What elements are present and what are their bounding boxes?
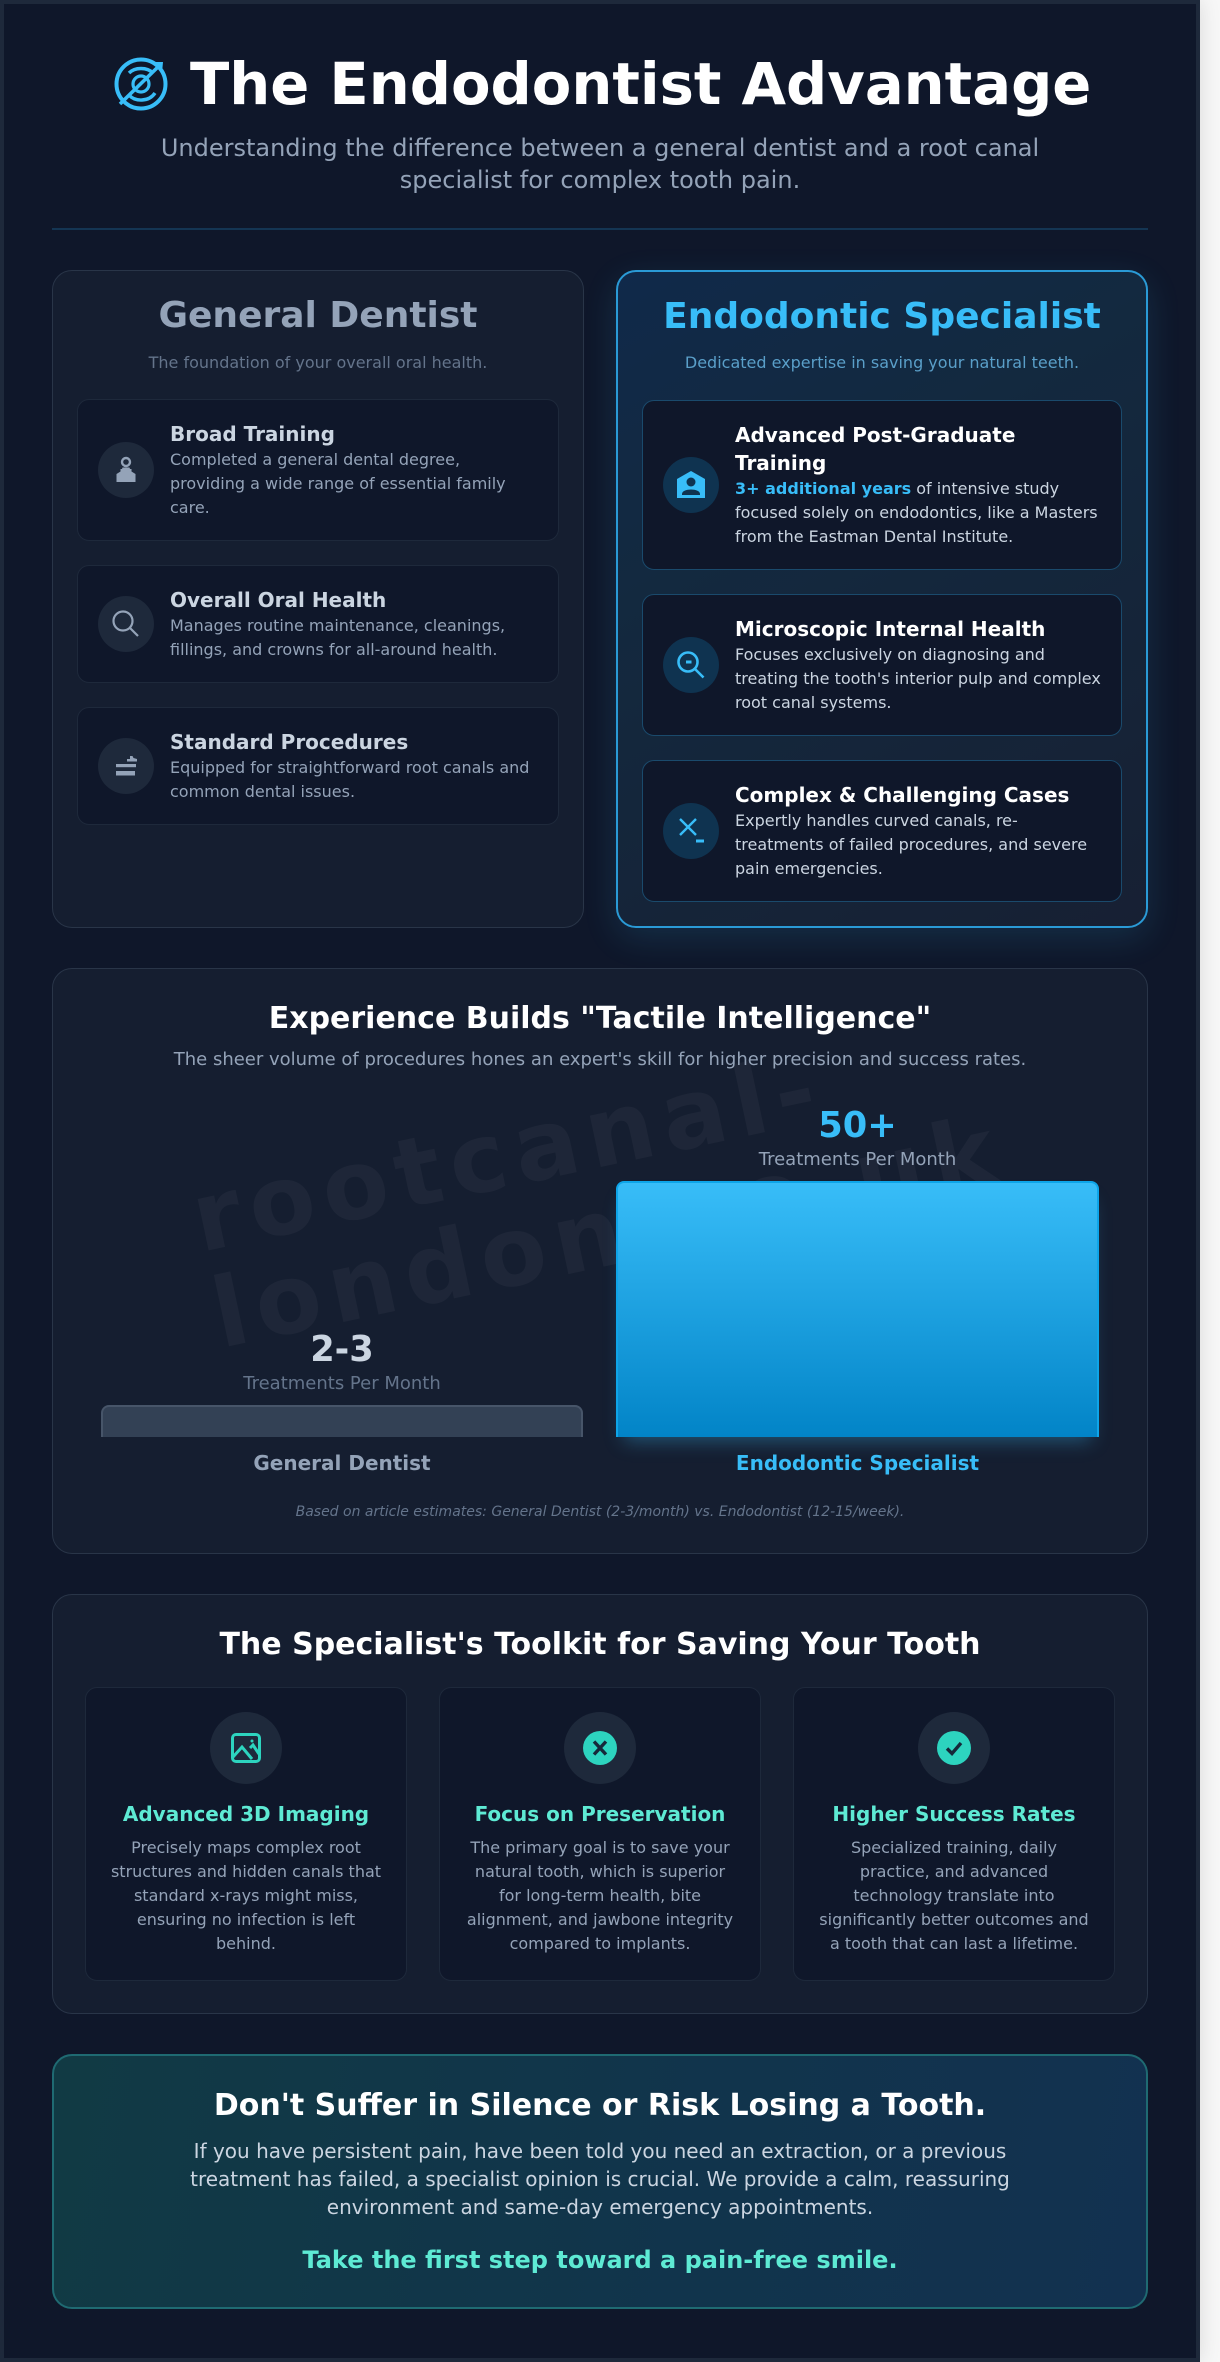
card description: technology translate into xyxy=(853,1886,1055,1905)
item: broad training: Broad Training xyxy=(170,422,335,446)
panel: general dentist xyxy=(52,270,584,928)
icon: check circle xyxy=(918,1712,990,1784)
card description xyxy=(111,1838,381,1953)
card title: Focus on Preservation xyxy=(475,1802,725,1826)
tagline: endodontic specialist: Dedicated expertise in saving your natural teeth. xyxy=(685,353,1079,372)
item: overall oral health: Overall Oral Health xyxy=(170,588,386,612)
callout text: treatment has failed, a specialist opinion is crucial. We provide a calm, reassuring xyxy=(190,2167,1010,2191)
card description: standard x-rays might miss, xyxy=(134,1886,358,1905)
item: standard procedures: common dental issues. xyxy=(170,782,355,801)
category label: Endodontic Specialist xyxy=(736,1451,979,1475)
card description: alignment, and jawbone integrity xyxy=(467,1910,733,1929)
card description: a tooth that can last a lifetime. xyxy=(830,1934,1078,1953)
icon: microscope lens xyxy=(663,637,719,693)
item: microscopic internal health xyxy=(642,594,1122,736)
panel: endodontic specialist xyxy=(616,270,1148,928)
callout text: environment and same-day emergency appointments. xyxy=(327,2195,873,2219)
card: higher success rates xyxy=(793,1687,1115,1981)
icon: graduate in house xyxy=(663,457,719,513)
item: standard procedures xyxy=(77,707,559,825)
card description: compared to implants. xyxy=(510,1934,690,1953)
card description: Specialized training, daily xyxy=(851,1838,1057,1857)
item: microscopic internal health: Microscopic Internal Health xyxy=(735,617,1045,641)
panel: specialist toolkit xyxy=(52,1594,1148,2014)
item: overall oral health xyxy=(77,565,559,683)
item: post-graduate training: from the Eastman Dental Institute. xyxy=(735,527,1013,546)
card title: Advanced 3D Imaging xyxy=(123,1802,369,1826)
card description: ensuring no infection is left xyxy=(137,1910,355,1929)
icon: magnifier xyxy=(98,596,154,652)
card: focus on preservation xyxy=(439,1687,761,1981)
item: overall oral health: fillings, and crowns for all-around health. xyxy=(170,640,498,659)
icon: circled x xyxy=(564,1712,636,1784)
icon: target with arrow xyxy=(114,58,168,110)
subtitle xyxy=(161,134,1039,194)
card description: The primary goal is to save your xyxy=(470,1838,730,1857)
card description xyxy=(467,1838,733,1953)
bar rectangle xyxy=(101,1405,583,1437)
icon: cross and dash xyxy=(663,803,719,859)
watermark: rootcanal- xyxy=(182,1031,834,1275)
item: broad training: Completed a general dental degree, xyxy=(170,450,460,469)
heading: toolkit: The Specialist's Toolkit for Saving Your Tooth xyxy=(219,1627,981,1662)
item: overall oral health: Manages routine maintenance, cleanings, xyxy=(170,616,505,635)
item: post-graduate training: Advanced Post-Graduate xyxy=(735,423,1015,447)
value label: Treatments Per Month xyxy=(759,1149,956,1170)
value label: Treatments Per Month xyxy=(243,1373,441,1394)
value: 50+: 50+ xyxy=(818,1105,897,1146)
card title: Higher Success Rates xyxy=(832,1802,1076,1826)
icon: image frame xyxy=(210,1712,282,1784)
category label: General Dentist xyxy=(253,1451,431,1475)
item: broad training xyxy=(77,399,559,541)
card description xyxy=(819,1838,1089,1953)
heading: tactile intelligence: Experience Builds "Tactile Intelligence" xyxy=(269,1001,931,1036)
card description: for long-term health, bite xyxy=(499,1886,701,1905)
title with icon: The Endodontist Advantage xyxy=(190,51,1091,118)
callout heading: Don't Suffer in Silence or Risk Losing a Tooth. xyxy=(214,2088,986,2123)
callout text: If you have persistent pain, have been told you need an extraction, or a previous xyxy=(194,2139,1006,2163)
item: microscopic internal health: Focuses exclusively on diagnosing and xyxy=(735,645,1045,664)
item: microscopic internal health: treating the tooth's interior pulp and complex xyxy=(735,669,1101,688)
chart footnote: Based on article estimates: General Dentist (2-3/month) vs. Endodontist (12-15/week). xyxy=(296,1504,904,1520)
item: post-graduate training: focused solely on endodontics, like a Masters xyxy=(735,503,1098,522)
callout: call to action xyxy=(52,2054,1148,2309)
item: post-graduate training: Training xyxy=(735,451,826,475)
card description: natural tooth, which is superior xyxy=(475,1862,725,1881)
item: complex cases xyxy=(642,760,1122,902)
bar rectangle xyxy=(616,1181,1099,1437)
bar: endodontic specialist xyxy=(614,1105,1102,1475)
item: microscopic internal health: root canal systems. xyxy=(735,693,892,712)
icon: person xyxy=(98,442,154,498)
heading: endodontic specialist: Endodontic Specialist xyxy=(663,296,1101,337)
item: complex cases: Expertly handles curved canals, re- xyxy=(735,811,1018,830)
chart subtitle: The sheer volume of procedures hones an expert's skill for higher precision and success rates. xyxy=(174,1049,1026,1070)
bar: general dentist xyxy=(101,1329,583,1475)
card description: behind. xyxy=(216,1934,276,1953)
icon: tools xyxy=(98,738,154,794)
heading: general dentist: General Dentist xyxy=(158,295,478,336)
item: post-graduate training: 3+ additional years of intensive study xyxy=(735,479,1059,498)
item: standard procedures: Equipped for straightforward root canals and xyxy=(170,758,529,777)
item: post-graduate training xyxy=(642,400,1122,570)
watermark: london.co.uk xyxy=(203,1093,1015,1370)
subtitle: Understanding the difference between a general dentist and a root canal xyxy=(161,134,1039,162)
tagline: general dentist: The foundation of your overall oral health. xyxy=(149,353,487,372)
item: broad training: care. xyxy=(170,498,210,517)
value: 2-3: 2-3 xyxy=(310,1329,374,1370)
item: broad training: providing a wide range of essential family xyxy=(170,474,506,493)
card description: Precisely maps complex root xyxy=(131,1838,361,1857)
card description: significantly better outcomes and xyxy=(819,1910,1089,1929)
item: complex cases: Complex & Challenging Cases xyxy=(735,783,1069,807)
call to action line: Take the first step toward a pain-free smile. xyxy=(302,2246,898,2274)
item: complex cases: treatments of failed procedures, and severe xyxy=(735,835,1087,854)
subtitle: specialist for complex tooth pain. xyxy=(400,166,800,194)
panel: tactile intelligence chart xyxy=(52,968,1148,1554)
item: complex cases: pain emergencies. xyxy=(735,859,883,878)
item: standard procedures: Standard Procedures xyxy=(170,730,408,754)
card description: structures and hidden canals that xyxy=(111,1862,381,1881)
header xyxy=(114,51,1091,194)
card description: practice, and advanced xyxy=(860,1862,1048,1881)
callout text xyxy=(190,2139,1010,2219)
card: advanced 3d imaging xyxy=(85,1687,407,1981)
